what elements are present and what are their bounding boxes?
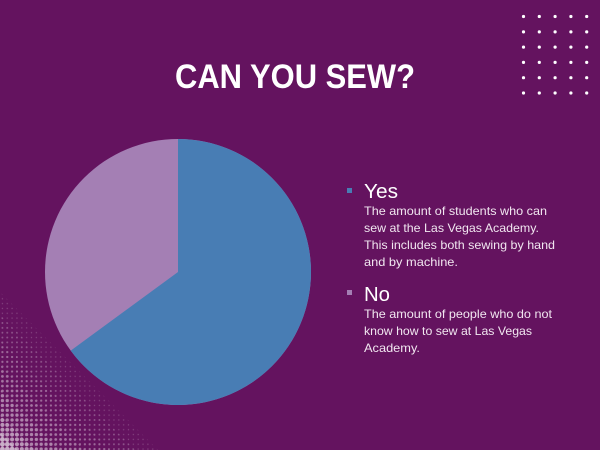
- heading: Yes: Yes: [364, 181, 398, 203]
- description: Yes: This includes both sewing by hand: [364, 239, 555, 252]
- heading: No: No: [364, 284, 390, 306]
- pie chart: [45, 139, 311, 405]
- description: No: Academy.: [364, 342, 420, 355]
- title: CAN YOU SEW?: [175, 58, 415, 96]
- slice: Yes: [71, 139, 311, 405]
- description: No: [364, 308, 553, 355]
- bullet: Yes: [347, 188, 352, 193]
- legend item: No: [347, 284, 553, 355]
- description: No: know how to sew at Las Vegas: [364, 325, 532, 338]
- description: Yes: The amount of students who can: [364, 205, 547, 218]
- description: No: The amount of people who do not: [364, 308, 553, 321]
- slice: No: [45, 139, 311, 405]
- legend: [347, 181, 555, 355]
- bullet: No: [347, 290, 352, 295]
- description: Yes: sew at the Las Vegas Academy.: [364, 222, 539, 235]
- legend item: Yes: [347, 181, 555, 269]
- description: Yes: [364, 205, 555, 269]
- halftone dot decoration bottom-left: [0, 292, 158, 450]
- dot grid decoration top-right: [522, 15, 588, 95]
- description: Yes: and by machine.: [364, 256, 458, 269]
